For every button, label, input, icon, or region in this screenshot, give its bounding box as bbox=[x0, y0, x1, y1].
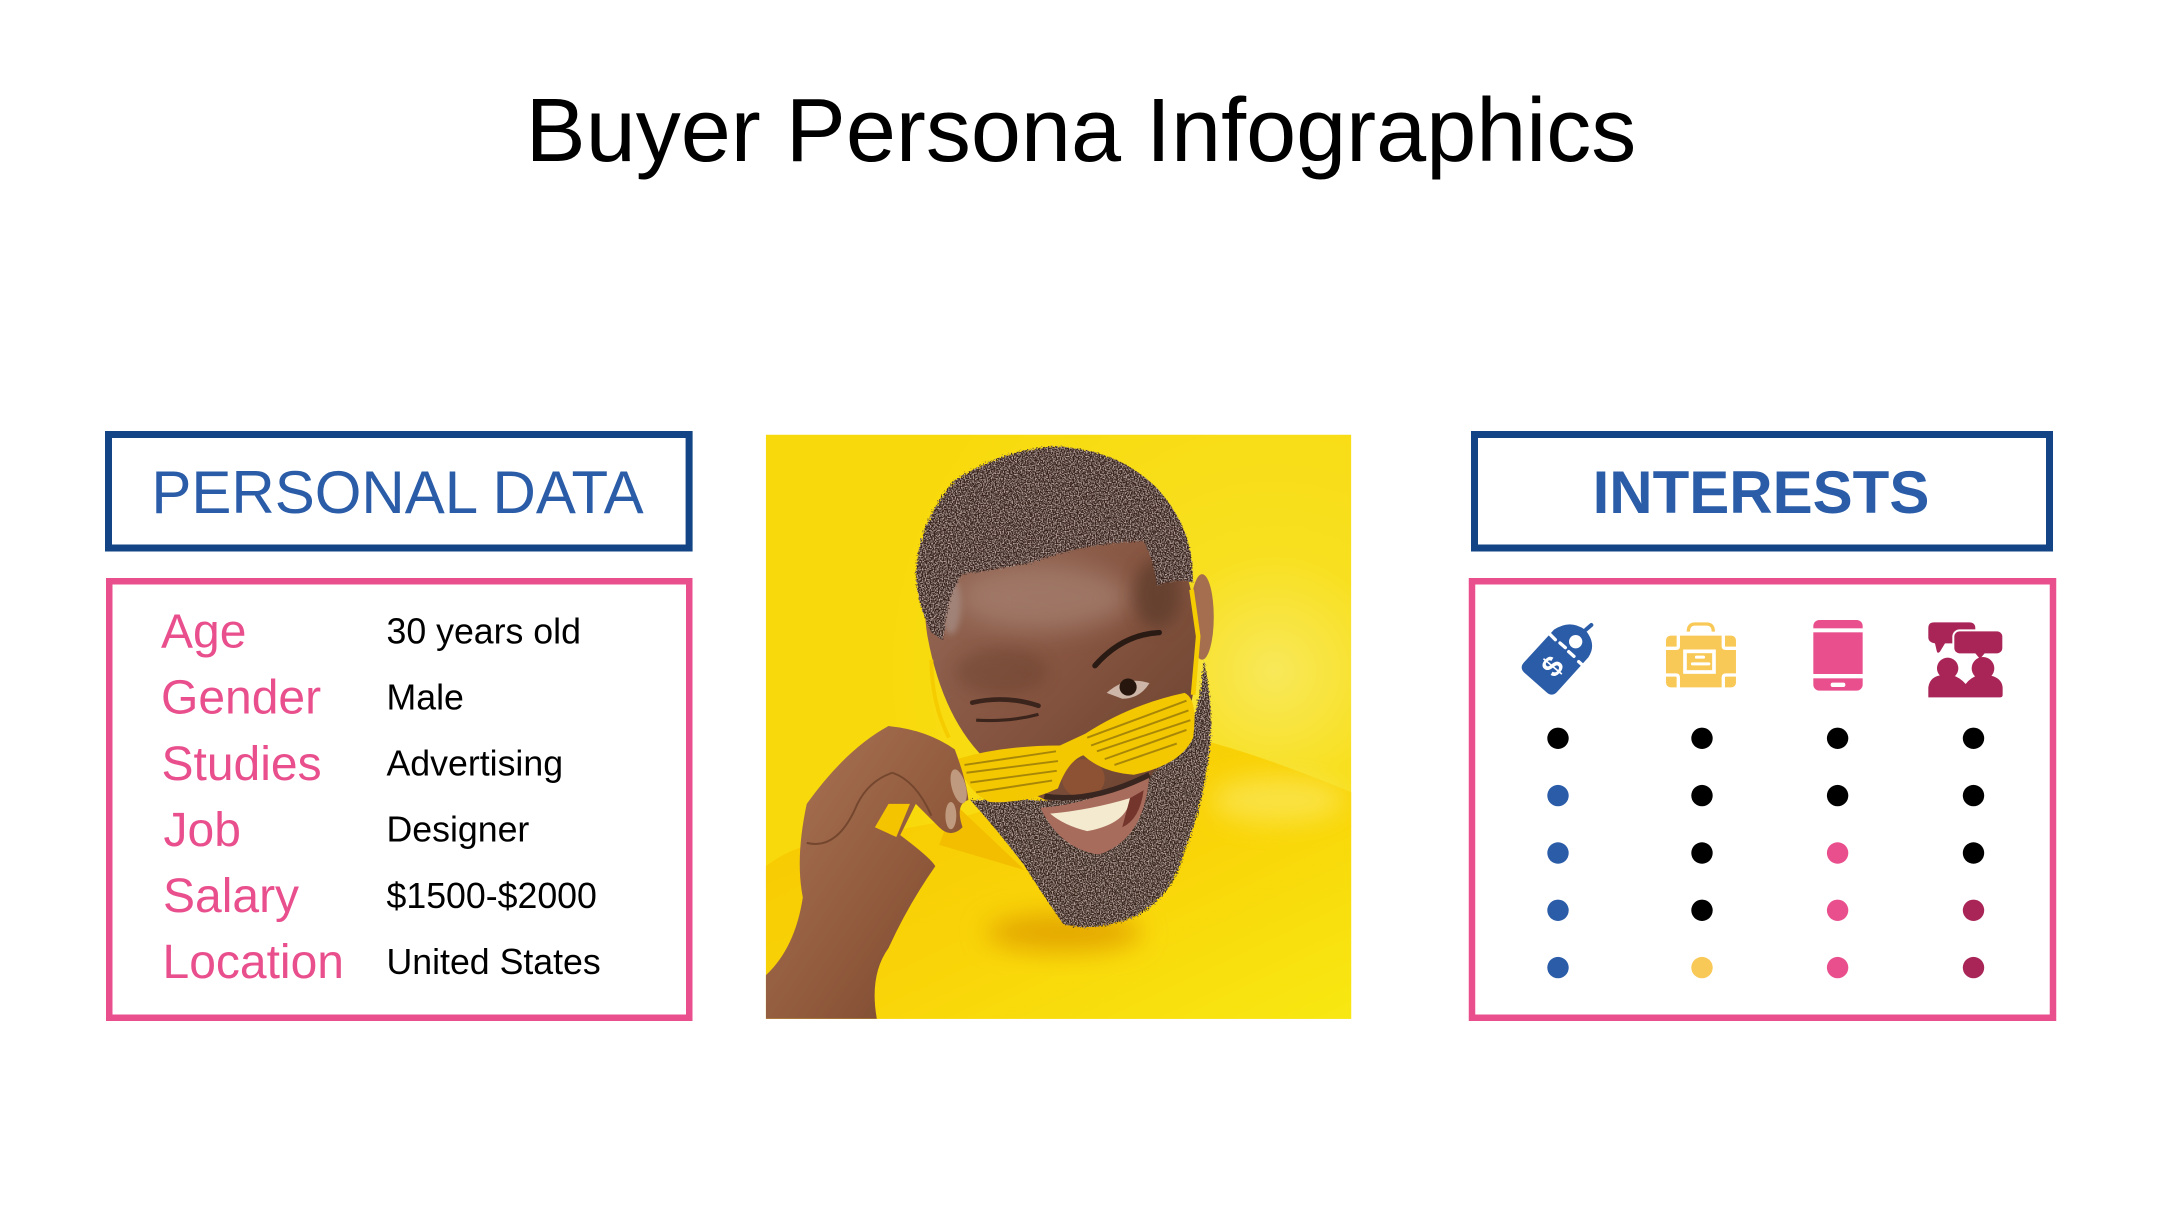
panel: interests dot grid bbox=[1472, 581, 2053, 1018]
value: salary: $1500-$2000 bbox=[386, 876, 597, 916]
dots: column 4 crimson bbox=[1963, 728, 1984, 978]
panel: personal data heading: PERSONAL DATA bbox=[151, 459, 644, 526]
label: location: Location bbox=[162, 936, 344, 989]
title: Buyer Persona Infographics bbox=[526, 81, 1636, 181]
label: salary: Salary bbox=[163, 870, 299, 923]
value: gender: Male bbox=[386, 678, 464, 718]
dots: column 2 yellow bbox=[1691, 728, 1713, 978]
photo: winking man with yellow shutter glasses bbox=[766, 435, 1351, 1019]
label: age: Age bbox=[161, 606, 246, 659]
dots: column 3 pink bbox=[1827, 728, 1848, 978]
icon: briefcase bbox=[1664, 624, 1738, 689]
dots: column 1 blue bbox=[1547, 728, 1569, 978]
panel: interests heading: INTERESTS bbox=[1593, 459, 1929, 526]
icon: price tag: $ bbox=[1535, 650, 1571, 683]
label: studies: Studies bbox=[162, 738, 322, 791]
value: location: United States bbox=[386, 942, 601, 982]
label: gender: Gender bbox=[161, 672, 321, 725]
panel: personal data list bbox=[109, 581, 689, 1018]
value: job: Designer bbox=[386, 810, 529, 850]
panel: personal data heading bbox=[108, 434, 689, 548]
icon: tablet bbox=[1813, 620, 1863, 691]
label: job: Job bbox=[164, 804, 241, 857]
value: studies: Advertising bbox=[386, 744, 563, 784]
value: age: 30 years old bbox=[386, 611, 581, 651]
icon: people talking bbox=[1928, 622, 2003, 697]
panel: interests heading bbox=[1474, 434, 2050, 548]
icon: price tag bbox=[1522, 624, 1592, 695]
